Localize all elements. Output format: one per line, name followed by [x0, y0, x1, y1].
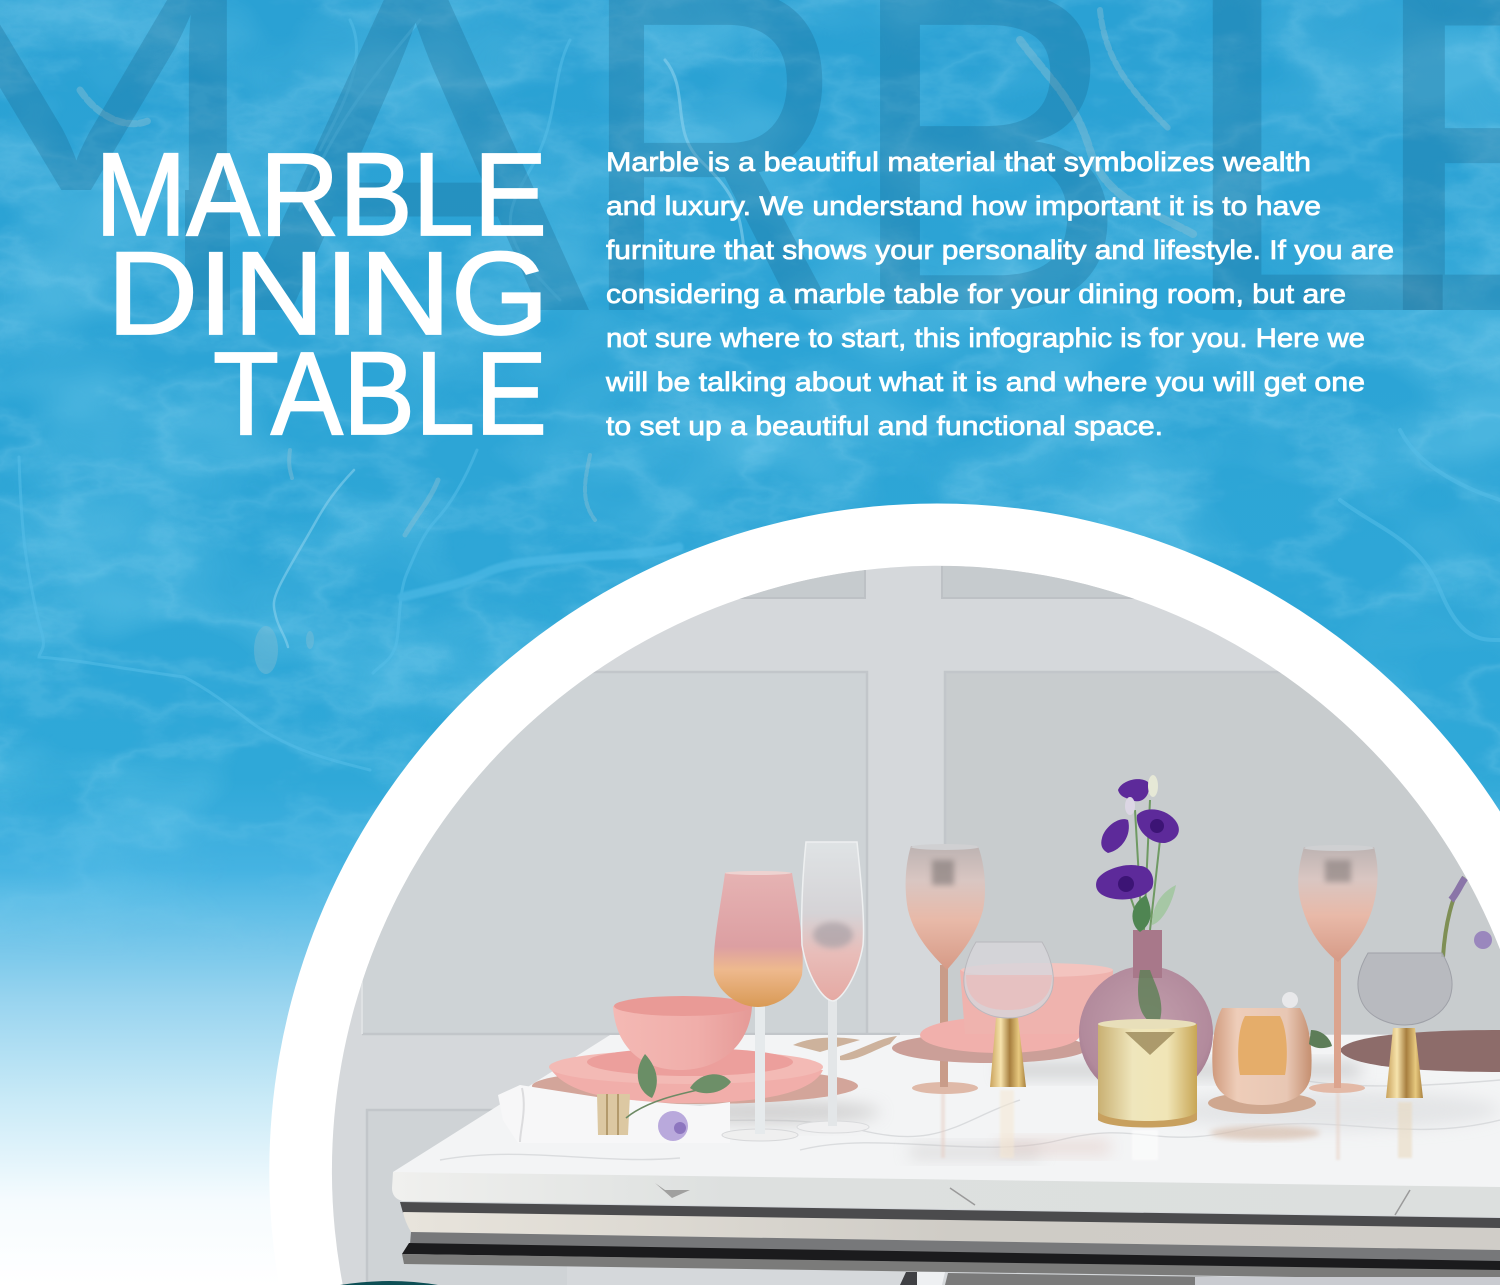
pink glass vase: [1079, 930, 1213, 1080]
purple lisianthus flowers: [1096, 775, 1179, 932]
intro text block: will be talking about what it is and where you will get one: [605, 367, 1365, 397]
champagne flute: [797, 842, 869, 1133]
title: DINING: [107, 228, 549, 360]
glass reflections on table: [941, 1090, 1412, 1160]
intro text block: furniture that shows your personality and lifestyle. If you are: [606, 235, 1394, 265]
left place setting: plates and bowl: [532, 996, 858, 1104]
intro text block: not sure where to start, this infographic is for you. Here we: [606, 323, 1365, 353]
table edge and chrome frame: [392, 1172, 1500, 1285]
cutlery: [793, 1036, 897, 1060]
intro text block: Marble is a beautiful material that symbolizes wealth: [606, 147, 1311, 177]
title: [95, 129, 549, 460]
dark charger plate: [1340, 1030, 1500, 1072]
title: TABLE: [213, 328, 547, 460]
wall panelling: [300, 560, 1500, 1285]
intro text block: to set up a beautiful and functional space.: [606, 411, 1163, 441]
mirrored goblet: silver rose: [906, 844, 985, 1094]
title: MARBLE: [95, 129, 547, 261]
rose gold votive with candle: [1208, 992, 1332, 1114]
intro text block: and luxury. We understand how important it is to have: [606, 191, 1321, 221]
goblet with gold base, right: [1358, 953, 1452, 1098]
lavender sprig: [1443, 877, 1492, 957]
teal shape peeking at bottom: [340, 1281, 438, 1285]
wine glass: pink: [714, 871, 803, 1141]
right place setting: plates and bowl: [892, 963, 1113, 1063]
mirrored goblet: rose gold: [1298, 845, 1378, 1093]
napkin with ring and sprig: [498, 1054, 731, 1143]
intro text block: considering a marble table for your dining room, but are: [606, 279, 1346, 309]
intro text block: [605, 147, 1394, 441]
table top: [393, 1035, 1500, 1190]
photo: marble dining table setting: [300, 560, 1500, 1285]
white arch frame: [269, 503, 1500, 1285]
gold patterned votive: [1098, 1019, 1197, 1128]
watermark word MARBLE: [0, 0, 1500, 409]
goblet with gold base, left: [964, 942, 1053, 1087]
